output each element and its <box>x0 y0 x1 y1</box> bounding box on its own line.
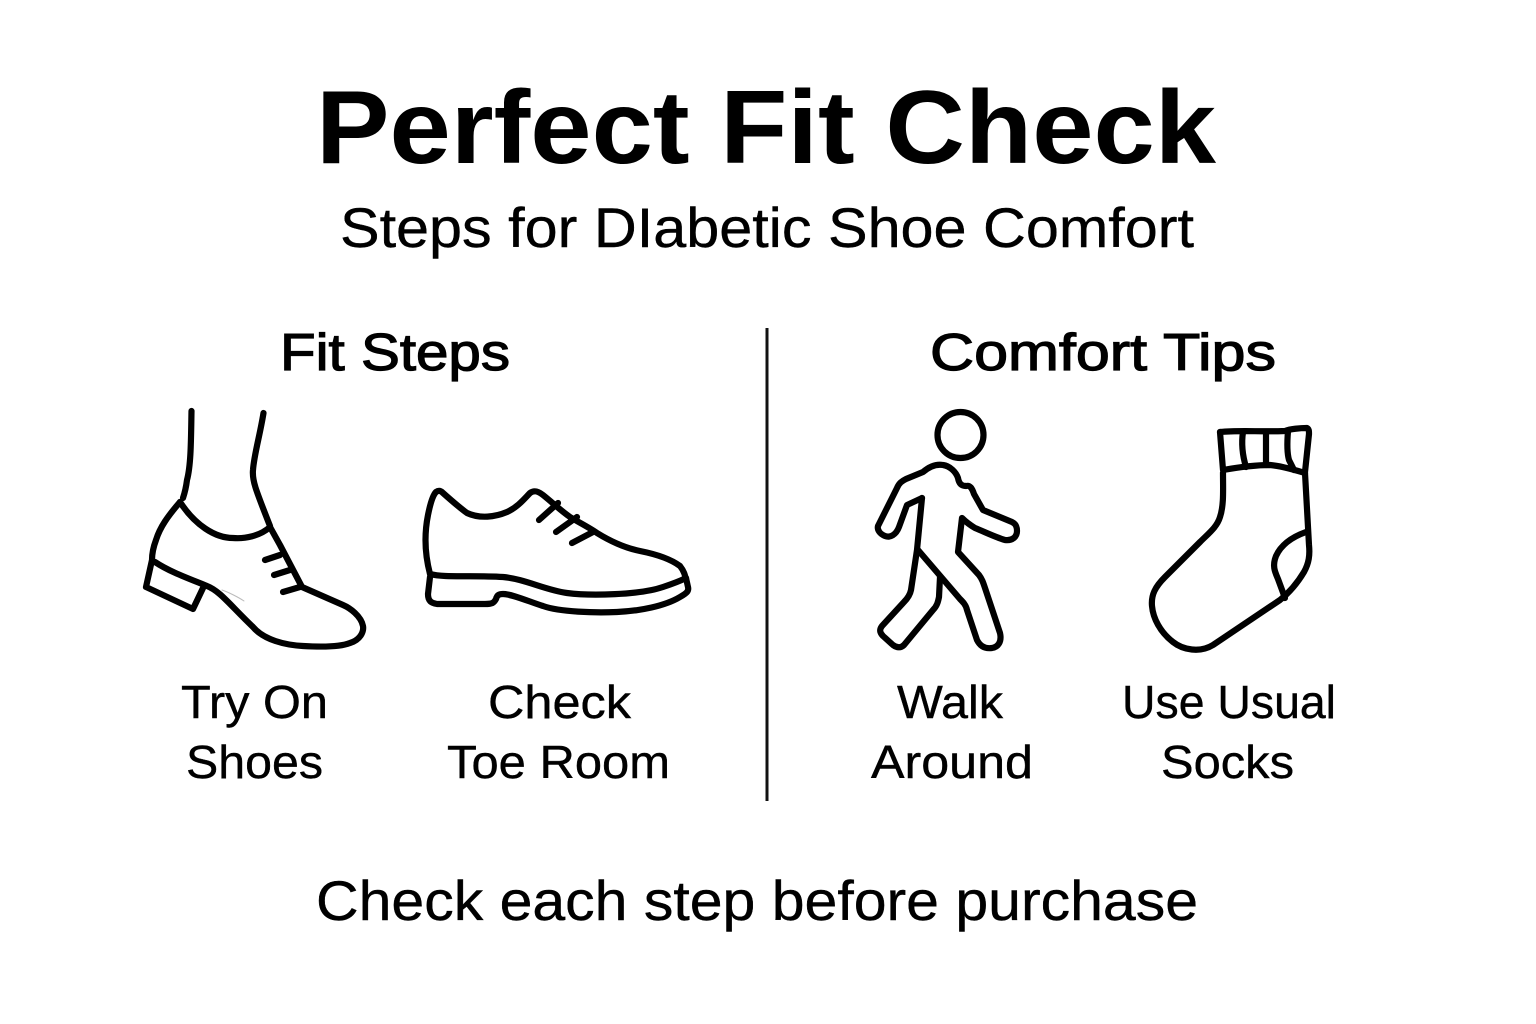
icon: sock <box>1152 428 1309 650</box>
label: walk around: Walk <box>897 676 1004 728</box>
label: use usual socks: Socks <box>1161 736 1294 788</box>
label: check toe room: Toe Room <box>447 736 670 788</box>
label: try on shoes: Try On <box>181 676 328 728</box>
heading: comfort tips: Comfort Tips <box>930 324 1276 382</box>
label: check toe room: Check <box>488 676 632 728</box>
panel: comfort tips <box>871 324 1336 788</box>
label: try on shoes: Shoes <box>186 736 323 788</box>
footer note: Check each step before purchase <box>316 869 1198 932</box>
subtitle: Steps for DIabetic Shoe Comfort <box>340 196 1194 259</box>
label: walk around <box>871 676 1033 788</box>
title: Perfect Fit Check <box>316 70 1216 186</box>
icon: walking person <box>878 412 1017 648</box>
label: use usual socks <box>1122 676 1336 788</box>
label: try on shoes <box>181 676 328 788</box>
icon: foot in heeled shoe <box>146 411 363 647</box>
panel: fit steps <box>146 324 688 788</box>
label: walk around: Around <box>871 736 1033 788</box>
label: check toe room <box>447 676 670 788</box>
heading: fit steps: Fit Steps <box>280 324 510 382</box>
divider <box>766 328 768 801</box>
label: use usual socks: Use Usual <box>1122 676 1336 728</box>
icon: laced shoe <box>426 491 688 612</box>
